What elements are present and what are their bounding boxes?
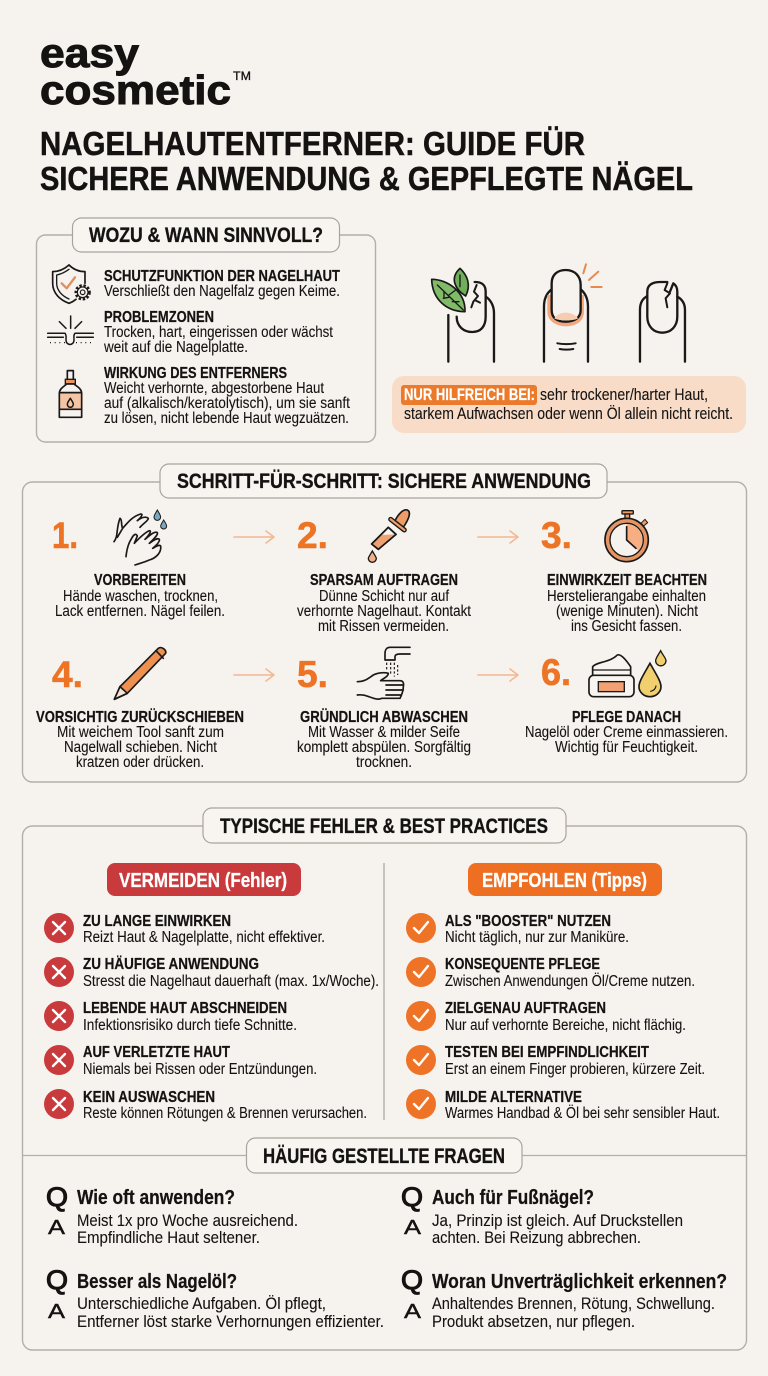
- list: Tipps: ALS "BOOSTER" NUTZEN: [445, 913, 611, 930]
- icon: shield with gear: [53, 265, 89, 303]
- text: Wirkung des Entferners: WIRKUNG DES ENTFERNERS: [104, 365, 287, 382]
- list: Fehler: Stresst die Nagelhaut dauerhaft (max. 1x/Woche).: [83, 973, 379, 990]
- step 3: Herstelierangabe einhalten: [547, 588, 706, 605]
- logo: easy cosmetic: [40, 30, 251, 113]
- text: Problemzonen: PROBLEMZONEN: [104, 309, 214, 326]
- heading: Wozu und wann sinnvoll: WOZU & WANN SINNVOLL?: [89, 224, 323, 247]
- text: Schutzfunktion: Verschließt den Nagelfalz gegen Keime.: [104, 283, 340, 300]
- heading: Schritt für Schritt: [160, 464, 607, 498]
- badge: Empfohlen: EMPFOHLEN (Tipps): [482, 870, 647, 892]
- text: Wirkung des Entferners: [104, 365, 351, 427]
- callout: nur hilfreich bei: sehr trockener/harter Haut,: [540, 386, 708, 404]
- badge: Vermeiden: VERMEIDEN (Fehler): [119, 870, 287, 892]
- step 5: trocknen.: [356, 754, 412, 771]
- list: Fehler: AUF VERLETZTE HAUT: [83, 1044, 230, 1061]
- faq: Woran Unverträglichkeit erkennen: Produkt absetzen, nur pflegen.: [432, 1313, 635, 1331]
- list: Fehler: [83, 913, 379, 1122]
- step 3: 3.: [541, 515, 572, 556]
- faq: Woran Unverträglichkeit erkennen: Woran Unverträglichkeit erkennen?: [432, 1271, 727, 1293]
- list: Tipps: Zwischen Anwendungen Öl/Creme nutzen.: [445, 972, 695, 990]
- title: [40, 125, 693, 197]
- heading: Typische Fehler: TYPISCHE FEHLER & BEST PRACTICES: [220, 815, 548, 838]
- panel: Typische Fehler und FAQ: [22, 808, 746, 1350]
- faq: Besser als Nagelöl: Unterschiedliche Aufgaben. Öl pflegt,: [77, 1295, 326, 1313]
- list: Tipps: ZIELGENAU AUFTRAGEN: [445, 1000, 606, 1017]
- list: Tipps: Nicht täglich, nur zur Maniküre.: [445, 929, 629, 946]
- step 2: Dünne Schicht nur auf: [319, 588, 450, 605]
- step 3: (wenige Minuten). Nicht: [556, 603, 699, 620]
- list: Tipps: [445, 913, 720, 1122]
- faq: Woran Unverträglichkeit erkennen: Q: [401, 1265, 423, 1295]
- logo: easy cosmetic: TM: [233, 71, 251, 83]
- step 1: 1.: [52, 515, 78, 556]
- faq: Wie oft anwenden: A: [48, 1217, 66, 1239]
- icon: cream jar and oil drops: [589, 651, 666, 697]
- step 4: Nagelwall schieben. Nicht: [64, 739, 218, 756]
- column: Vermeiden: [44, 863, 379, 1122]
- faq: Besser als Nagelöl: Q: [46, 1265, 68, 1295]
- list: Fehler: LEBENDE HAUT ABSCHNEIDEN: [83, 1000, 287, 1017]
- step 5: komplett abspülen. Sorgfältig: [297, 739, 471, 756]
- heading: Schritt für Schritt: SCHRITT-FÜR-SCHRITT: SICHERE ANWENDUNG: [177, 470, 591, 493]
- heading: FAQ: HÄUFIG GESTELLTE FRAGEN: [263, 1145, 505, 1168]
- icon: problem skin zone: [48, 316, 93, 344]
- faq: Besser als Nagelöl: [46, 1265, 384, 1331]
- callout: nur hilfreich bei: [392, 376, 746, 433]
- faq: Woran Unverträglichkeit erkennen: [401, 1265, 727, 1331]
- logo: easy cosmetic: easy: [40, 30, 139, 76]
- list: Fehler: ZU LANGE EINWIRKEN: [83, 913, 231, 930]
- step 6: [525, 651, 728, 756]
- step 3: EINWIRKZEIT BEACHTEN: [547, 572, 707, 589]
- panel: Schritt für Schritt: [22, 464, 746, 782]
- list: Tipps: Warmes Handbad & Öl bei sehr sensibler Haut.: [445, 1104, 720, 1122]
- faq: Besser als Nagelöl: Entferner löst starke Verhornungen effizienter.: [77, 1313, 384, 1331]
- icon: cuticle stick: [114, 648, 166, 699]
- faq: Auch für Fußnägel: Ja, Prinzip ist gleich. Auf Druckstellen: [432, 1212, 683, 1230]
- icon: finger with overgrown cuticle: [544, 264, 602, 362]
- list: Fehler: Niemals bei Rissen oder Entzündungen.: [83, 1061, 317, 1078]
- step 5: [297, 647, 471, 771]
- faq: Auch für Fußnägel: A: [404, 1217, 422, 1239]
- text: Schutzfunktion: [104, 268, 340, 300]
- step 3: ins Gesicht fassen.: [571, 618, 682, 635]
- list: Fehler: KEIN AUSWASCHEN: [83, 1089, 215, 1106]
- list: Tipps: Erst an einem Finger probieren, kürzere Zeit.: [445, 1061, 705, 1078]
- list: Fehler: Infektionsrisiko durch tiefe Schnitte.: [83, 1017, 297, 1034]
- icons: orange checks: [406, 913, 436, 1119]
- heading: Typische Fehler: [203, 808, 566, 843]
- step 4: [36, 648, 244, 771]
- icon: remover bottle: [59, 371, 82, 417]
- text: Problemzonen: Trocken, hart, eingerissen oder wächst: [104, 324, 334, 341]
- panel: Wozu und wann sinnvoll: [36, 218, 376, 442]
- heading: Wozu und wann sinnvoll: [72, 218, 340, 252]
- step 6: Wichtig für Feuchtigkeit.: [555, 739, 698, 756]
- step 5: GRÜNDLICH ABWASCHEN: [300, 707, 468, 726]
- title: NAGELHAUTENTFERNER: GUIDE FÜR: [40, 125, 585, 162]
- list: Fehler: Reizt Haut & Nagelplatte, nicht effektiver.: [83, 929, 325, 946]
- step 2: 2.: [297, 515, 328, 556]
- step 2: SPARSAM AUFTRAGEN: [310, 572, 458, 589]
- faq: Wie oft anwenden: [46, 1182, 298, 1247]
- step 1: [52, 510, 225, 620]
- faq: Wie oft anwenden: Q: [46, 1182, 68, 1212]
- faq: Wie oft anwenden: Wie oft anwenden?: [77, 1187, 235, 1209]
- icon: stopwatch: [605, 511, 648, 562]
- badge: Empfohlen: [468, 863, 662, 896]
- icons: red crosses: [44, 913, 74, 1119]
- icon: washing hands: [114, 510, 167, 565]
- step 6: 6.: [541, 652, 571, 693]
- text: Wirkung des Entferners: auf (alkalisch/keratolytisch), um sie sanft: [104, 395, 351, 412]
- step 4: kratzen oder drücken.: [76, 754, 204, 771]
- step 6: PFLEGE DANACH: [572, 709, 681, 726]
- icon: finger with leaves: [432, 268, 494, 362]
- list: Fehler: ZU HÄUFIGE ANWENDUNG: [83, 955, 259, 973]
- step 4: 4.: [52, 654, 83, 695]
- step 6: Nagelöl oder Creme einmassieren.: [525, 724, 728, 741]
- arrows between steps: [234, 531, 518, 681]
- step 1: Lack entfernen. Nägel feilen.: [55, 603, 225, 620]
- step 2: [297, 510, 472, 635]
- step 4: Mit weichem Tool sanft zum: [57, 724, 224, 741]
- icon: dropper: [368, 510, 409, 562]
- step 5: 5.: [297, 654, 328, 695]
- logo: easy cosmetic: cosmetic: [40, 67, 231, 113]
- step 2: verhornte Nagelhaut. Kontakt: [297, 603, 472, 620]
- illustration: three fingers: [432, 264, 685, 362]
- list: Tipps: Nur auf verhornte Bereiche, nicht flächig.: [445, 1017, 686, 1034]
- step 4: VORSICHTIG ZURÜCKSCHIEBEN: [36, 707, 244, 726]
- faq: Wie oft anwenden: Meist 1x pro Woche ausreichend.: [77, 1212, 298, 1230]
- text: Problemzonen: [103, 309, 334, 356]
- faq: Woran Unverträglichkeit erkennen: Anhaltendes Brennen, Rötung, Schwellung.: [432, 1295, 715, 1313]
- faq: Auch für Fußnägel: Q: [401, 1182, 423, 1212]
- step 3: [541, 511, 707, 635]
- text: Wirkung des Entferners: zu lösen, nicht lebende Haut wegzuätzen.: [104, 410, 349, 427]
- faq: Auch für Fußnägel: [401, 1182, 683, 1247]
- icon: hand under faucet: [357, 647, 410, 699]
- column: Empfohlen: [406, 863, 720, 1122]
- step 2: mit Rissen vermeiden.: [318, 618, 449, 635]
- step 1: Hände waschen, trocknen,: [63, 588, 218, 605]
- callout: nur hilfreich bei: NUR HILFREICH BEI:: [404, 386, 535, 404]
- badge: Vermeiden: [107, 863, 301, 896]
- list: Fehler: Reste können Rötungen & Brennen verursachen.: [83, 1105, 367, 1122]
- faq: Besser als Nagelöl: Besser als Nagelöl?: [77, 1271, 237, 1293]
- faq: Woran Unverträglichkeit erkennen: A: [404, 1301, 422, 1323]
- faq: Auch für Fußnägel: achten. Bei Reizung abbrechen.: [432, 1229, 641, 1247]
- list: Tipps: TESTEN BEI EMPFINDLICHKEIT: [445, 1044, 649, 1061]
- list: Tipps: MILDE ALTERNATIVE: [445, 1089, 582, 1106]
- title: SICHERE ANWENDUNG & GEPFLEGTE NÄGEL: [40, 160, 693, 197]
- heading: FAQ: [246, 1138, 522, 1173]
- text: Problemzonen: weit auf die Nagelplatte.: [103, 339, 248, 356]
- list: Tipps: KONSEQUENTE PFLEGE: [445, 956, 600, 973]
- text: Schutzfunktion: SCHUTZFUNKTION DER NAGELHAUT: [104, 268, 340, 285]
- step 1: VORBEREITEN: [94, 572, 186, 589]
- faq: Auch für Fußnägel: Auch für Fußnägel?: [432, 1187, 594, 1209]
- faq: Wie oft anwenden: Empfindliche Haut seltener.: [77, 1229, 260, 1247]
- icon: finger with cracked nail: [640, 282, 685, 362]
- step 5: Mit Wasser & milder Seife: [308, 724, 460, 741]
- faq: Besser als Nagelöl: A: [48, 1301, 66, 1323]
- text: Wirkung des Entferners: Weicht verhornte, abgestorbene Haut: [104, 380, 325, 397]
